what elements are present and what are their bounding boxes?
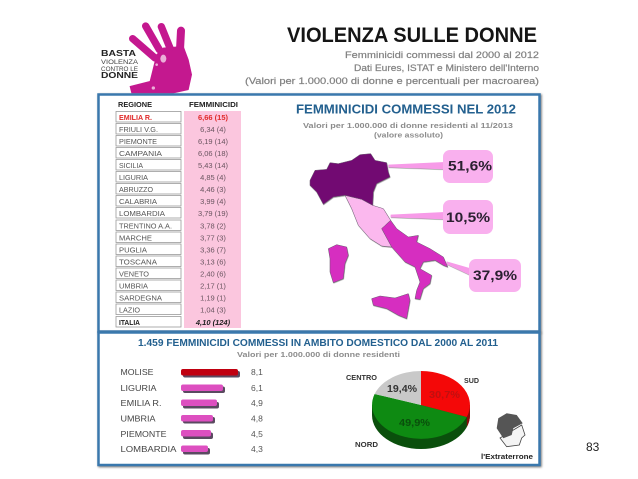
bar labels [120,367,177,454]
callout: north [443,150,493,183]
region names: SARDEGNA [119,294,162,302]
region values: 5,43 (14) [198,161,229,170]
page number: 83 [586,440,600,454]
region values: 3,36 (7) [200,246,226,254]
icon: hand print [130,26,192,93]
map subheading [303,121,513,140]
pie labels: NORD [355,440,379,449]
slice: nord [372,394,467,439]
region values: 2,17 (1) [200,282,226,290]
region names: MARCHE [119,234,152,242]
bar values: 8,1 [251,367,263,377]
region names: CALABRIA [119,197,157,206]
bar labels: LIGURIA [120,383,157,393]
region values: 3,13 (6) [200,258,226,266]
bar values: 6,1 [251,383,263,393]
region: south [382,220,448,299]
title: VIOLENZA SULLE DONNE [287,24,537,47]
region names: FRIULI V.G. [119,125,158,134]
connector lines [388,162,472,276]
logo: magenta hand with slogan [101,26,192,93]
region names [119,113,172,327]
bar labels: LOMBARDIA [120,444,177,454]
panel frame [98,94,540,332]
panel: domestic femicides [98,332,540,465]
bar chart [120,367,263,454]
panel: femicides 2012 [98,94,540,332]
region names: ABRUZZO [119,185,153,194]
region: Sicily [372,294,410,319]
region: centre [345,195,392,247]
bar values: 4,9 [251,398,263,408]
map subheading: (valore assoluto) [374,130,444,140]
region names: PIEMONTE [119,137,157,146]
slogan text: VIOLENZA [101,59,139,66]
callout: centre: 10,5% [446,209,491,225]
region values: 4,85 (4) [200,173,226,182]
table header [118,100,238,109]
bar values [251,367,263,454]
callout: south [469,259,521,292]
bar labels: UMBRIA [120,414,156,424]
pie values: 30,7% [429,389,461,401]
panel frame [98,332,540,465]
bar labels: MOLISE [120,367,154,377]
region boxes [116,112,181,327]
bar values: 4,5 [251,429,263,439]
subtitle block: Dati Eures, ISTAT e Ministero dell'Interno [354,63,539,74]
bar values: 4,8 [251,414,263,424]
region: north [310,154,390,205]
region names: ITALIA [119,318,141,327]
map subheading: Valori per 1.000.000 di donne residenti al 11/2013 [303,121,513,130]
table: regions [116,100,241,328]
region values: 1,19 (1) [200,294,226,302]
slice: centro [375,371,421,405]
brand name: l'Extraterrone [481,452,533,461]
pie labels: SUD [464,376,480,385]
slogan text: DONNE [101,71,139,80]
region names: EMILIA R. [119,113,152,122]
subtitle block: Femminicidi commessi dal 2000 al 2012 [345,50,539,61]
pie labels [346,373,480,449]
callout: south: 37,9% [473,267,518,283]
region names: VENETO [119,270,149,278]
slogan text: BASTA [101,49,136,58]
slogan text [101,49,139,80]
region values: 6,66 (15) [198,113,229,122]
region values: 3,79 (19) [198,209,229,218]
bars [181,369,238,452]
bar values: 4,3 [251,444,263,454]
value column background [184,111,241,328]
pie labels: CENTRO [346,373,377,382]
region values: 6,06 (18) [198,149,229,158]
region names: TRENTINO A.A. [119,222,172,230]
region names: LAZIO [119,306,140,314]
region names: SICILIA [119,161,143,170]
region values: 3,78 (2) [200,222,226,230]
pie side [372,405,470,449]
bar shadows [183,371,240,454]
panel heading: 1.459 FEMMINICIDI COMMESSI IN AMBITO DOMESTICO DAL 2000 AL 2011 [138,337,498,349]
region values [195,113,231,327]
subtitle block [245,50,539,87]
slogan text: CONTRO LE [101,66,139,73]
region names: UMBRIA [119,282,148,290]
bar labels: EMILIA R. [120,398,162,408]
region names: CAMPANIA [119,149,162,158]
region names: PUGLIA [119,246,147,254]
pie values: 19,4% [387,383,418,395]
subtitle block: (Valori per 1.000.000 di donne e percentuali per macroarea) [245,76,539,87]
region names: LIGURIA [119,173,148,182]
icon: l'Extraterrone head logo [497,413,525,447]
pie values [387,383,461,429]
callout: centre [443,200,493,234]
region values: 4,10 (124) [195,318,231,327]
region values: 3,77 (3) [200,234,226,242]
table header: FEMMINICIDI [189,100,238,109]
region names: TOSCANA [119,258,157,266]
pie chart [346,371,480,449]
region values: 3,99 (4) [200,197,226,206]
pie values: 49,9% [399,417,431,429]
region values: 6,19 (14) [198,137,229,146]
map of Italy by macroarea [310,154,472,319]
callout: north: 51,6% [448,158,493,174]
map heading: FEMMINICIDI COMMESSI NEL 2012 [296,102,516,116]
region values: 2,40 (6) [200,270,226,278]
region values: 1,04 (3) [200,306,226,314]
region names: LOMBARDIA [119,209,165,218]
region values: 6,34 (4) [200,125,226,134]
panel subheading: Valori per 1.000.000 di donne residenti [237,350,400,359]
table header: REGIONE [118,100,152,109]
slice: sud [421,371,470,417]
region values: 4,46 (3) [200,185,226,194]
region: Sardinia [328,245,348,283]
bar labels: PIEMONTE [120,429,167,439]
